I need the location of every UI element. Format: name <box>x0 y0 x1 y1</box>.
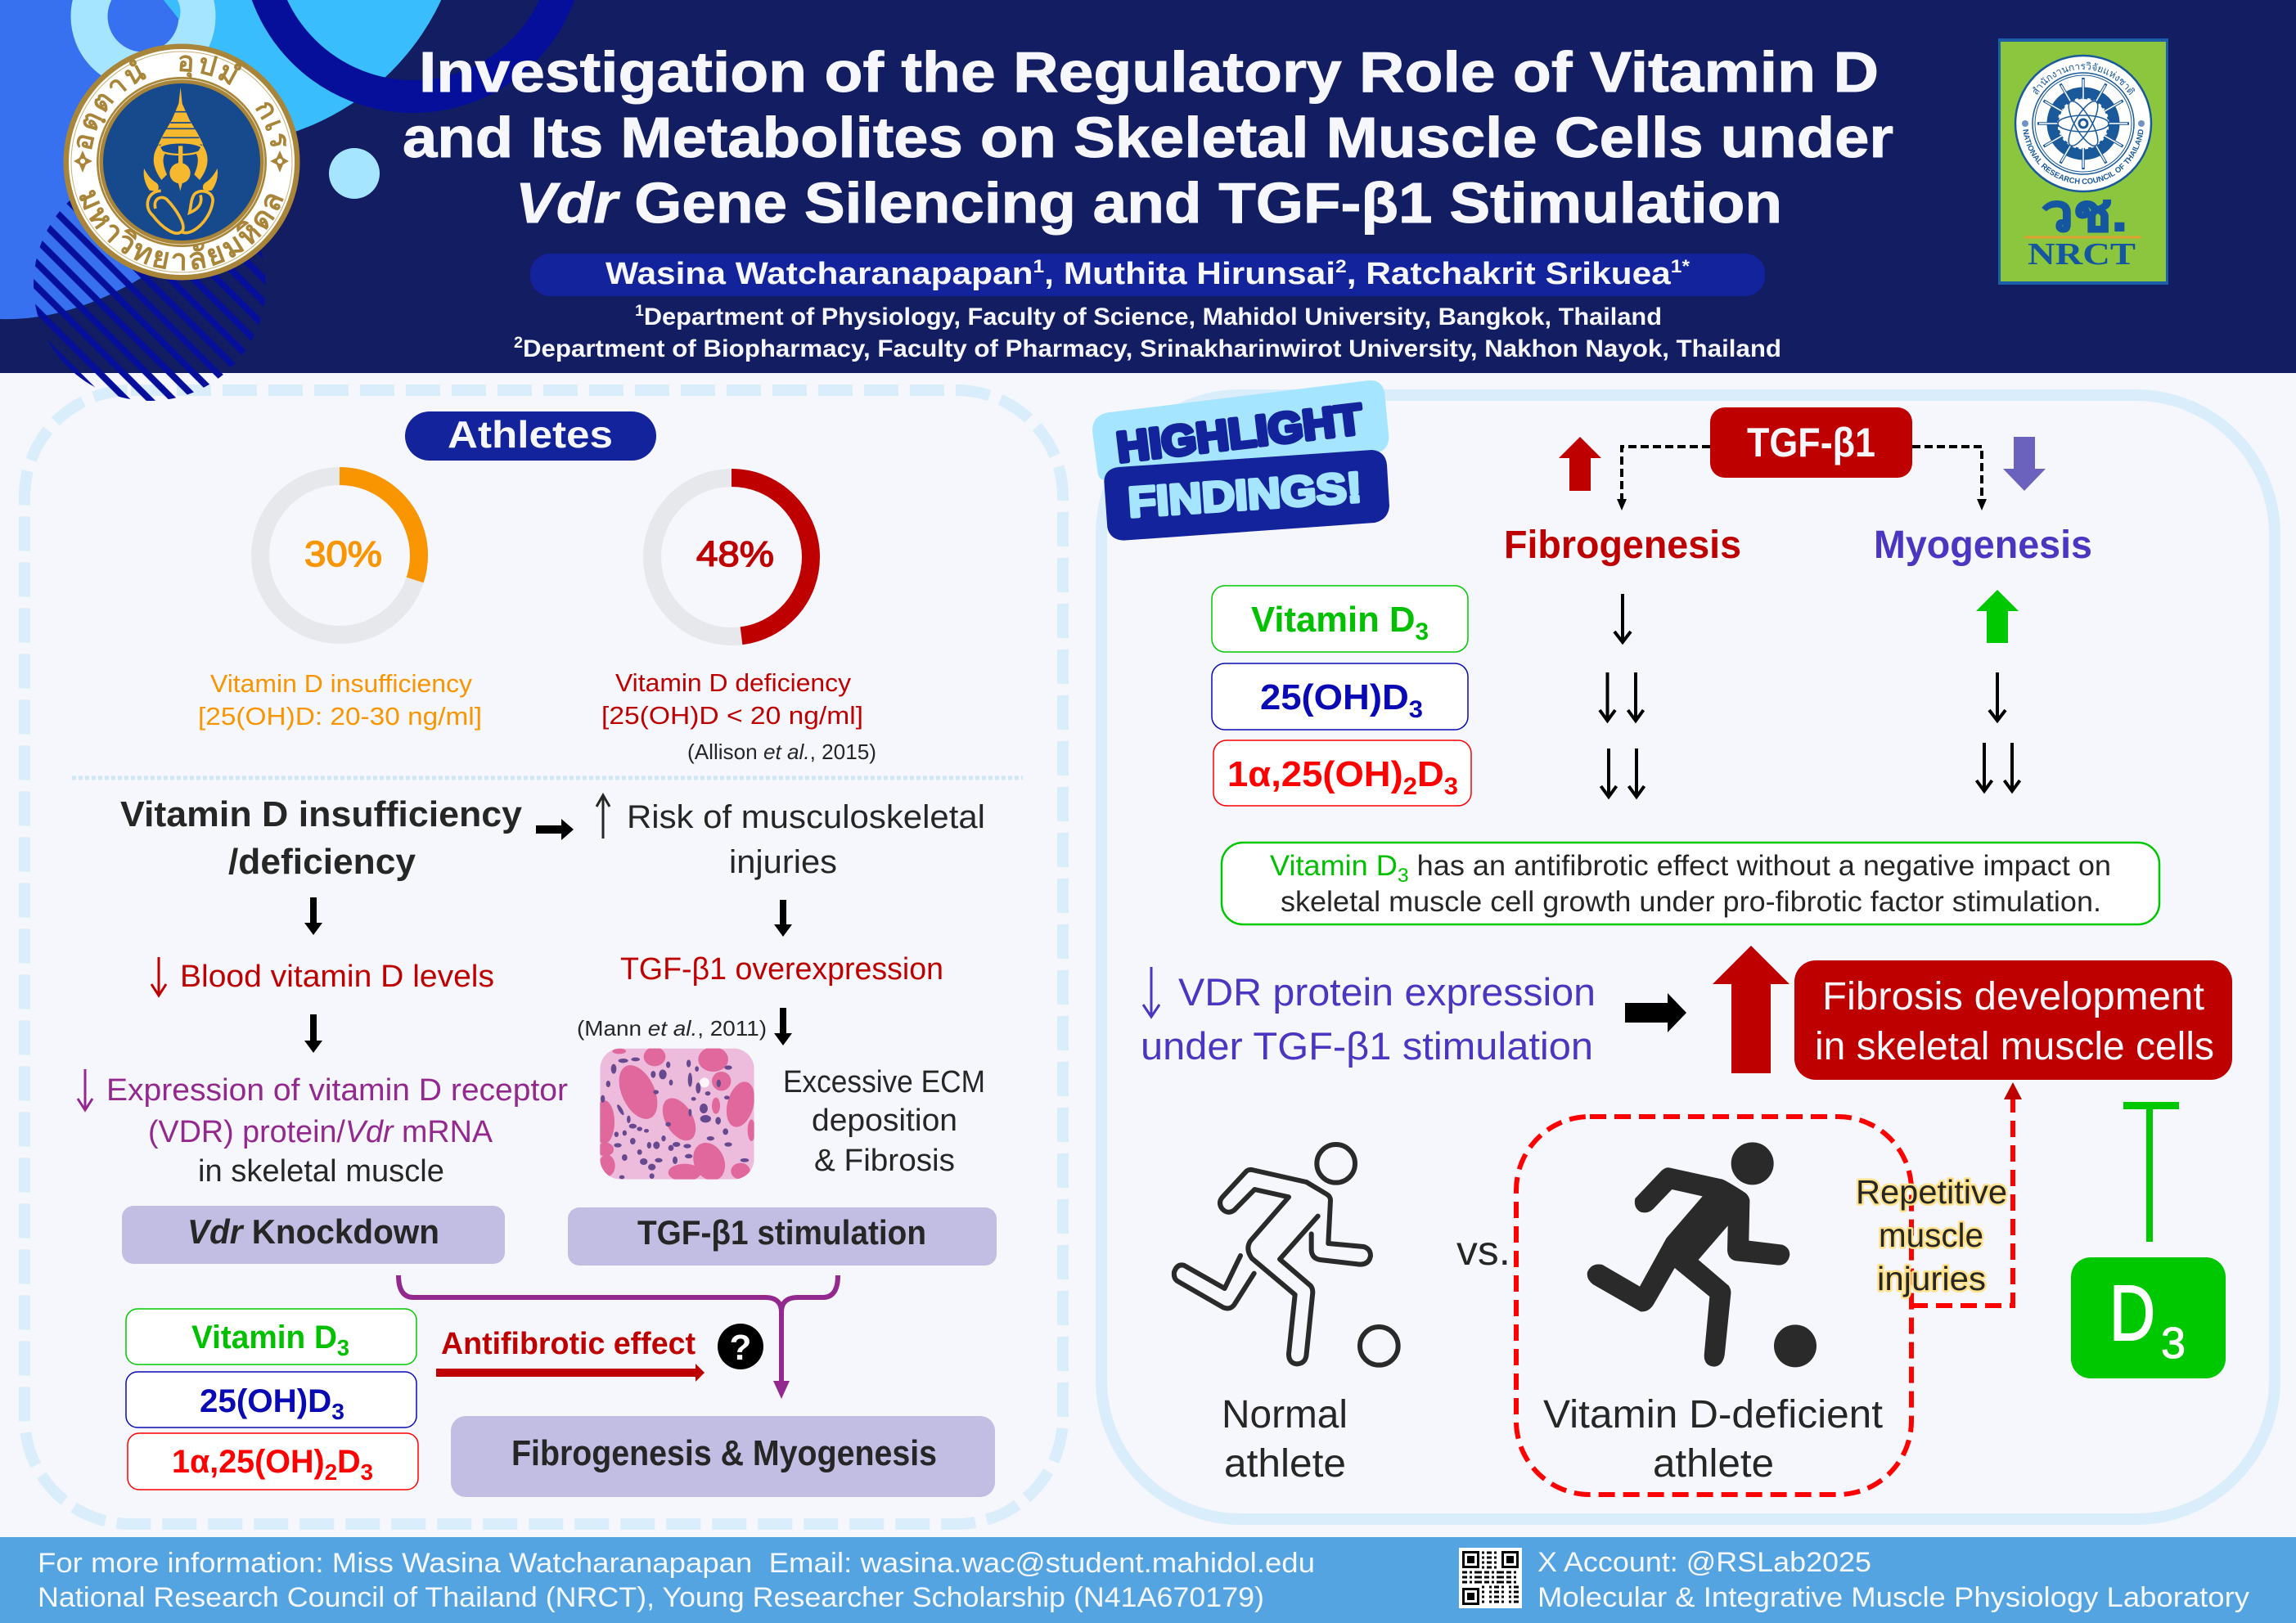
heading: myogenesis: Myogenesis <box>1874 524 2092 567</box>
authors pill <box>530 254 1765 296</box>
box: Vdr knockdown: Vdr Knockdown <box>187 1212 439 1251</box>
text: Vitamin D insufficiency/deficiency: Vitamin D insufficiency <box>120 794 523 834</box>
text: vitamin D-deficient athlete <box>1543 1393 1883 1486</box>
icon: QR code <box>1459 1548 1522 1608</box>
panel: athletes (left dashed) <box>25 390 1063 1524</box>
heading: Athletes: Athletes <box>448 413 613 456</box>
inhibition bar: D3 to fibrosis <box>2123 1102 2179 1242</box>
box: vitamin D3: Vitamin D <box>191 1320 342 1355</box>
text: excessive ECM deposition and fibrosis: & Fibrosis <box>814 1144 955 1178</box>
box: fibrosis development <box>1794 960 2232 1080</box>
box: TGF-beta1 stimulation: TGF-β1 stimulation <box>637 1213 926 1252</box>
title: and Its Metabolites on Skeletal Muscle Cells under <box>403 106 1893 169</box>
arrow: myogenesis green up <box>1976 590 2019 643</box>
label: Vitamin D insufficiency <box>198 669 482 731</box>
box: 25(OH)D3: 3 <box>331 1399 344 1424</box>
donut chart: 48% deficiency <box>652 478 811 636</box>
label: Vitamin D insufficiency: [25(OH)D: 20-30 ng/ml] <box>198 702 482 731</box>
text: antifibrotic effect: Antifibrotic effect <box>441 1327 696 1361</box>
arrow: down left 1 <box>304 897 322 935</box>
text: VDR protein expression <box>1141 970 1596 1068</box>
striped circle decoration <box>34 169 266 401</box>
affiliations: Department of Physiology, Faculty of Science, Mahidol University, Bangkok, Thailand <box>644 303 1662 330</box>
arrow: big red up <box>1713 946 1790 1073</box>
text: risk of musculoskeletal injuries: Risk of musculoskeletal <box>627 799 985 835</box>
logo: NRCT: วช. <box>2042 186 2127 242</box>
bracket arrow: to fibrogenesis and myogenesis <box>398 1275 838 1399</box>
box: Vdr knockdown <box>122 1206 505 1264</box>
text: expression of VDR <box>106 1073 568 1189</box>
callout: vitamin D3 antifibrotic effect: skeletal muscle cell growth under pro-fibrotic factor stimulation. <box>1281 886 2101 918</box>
authors pill: 1 <box>1033 256 1044 276</box>
text: Vitamin D insufficiency/deficiency: /deficiency <box>228 842 416 882</box>
row: 25(OH)D3: 3 <box>1409 696 1423 723</box>
row: vitamin D3: Vitamin D <box>1251 600 1416 640</box>
header decoration shapes <box>0 0 569 319</box>
text: excessive ECM deposition and fibrosis: Excessive ECM <box>783 1065 985 1099</box>
row: 25(OH)D3: 25(OH)D <box>1260 677 1404 717</box>
row: vitamin D3 <box>1212 586 1468 652</box>
title: Vdr Gene Silencing and TGF-β1 Stimulation <box>515 171 1782 235</box>
image: fibrosis histology <box>600 1049 754 1180</box>
callout: vitamin D3 antifibrotic effect: 3 <box>1398 865 1409 887</box>
box: fibrogenesis and myogenesis <box>451 1416 995 1497</box>
footer: contact text: For more information: Miss Wasina Watcharanapapan Email: wasina.wac@student.mahidol.edu <box>38 1548 1315 1579</box>
affiliations: 2 <box>514 335 523 352</box>
arrow: fibrogenesis up <box>1559 437 1601 491</box>
arrow: down right 2 <box>774 1008 792 1045</box>
text: expression of VDR: in skeletal muscle <box>198 1154 444 1189</box>
icon: normal athlete (outline) <box>1174 1144 1398 1365</box>
text: vitamin D-deficient athlete: Vitamin D-deficient <box>1543 1393 1883 1436</box>
row: 1alpha,25(OH)2D3 <box>1213 740 1471 806</box>
donut chart: 30% insufficiency <box>260 476 419 635</box>
citation: Mann: (Mann et al., 2011) <box>577 1016 767 1041</box>
sticker: highlight findings: FINDINGS! <box>1127 464 1363 527</box>
box: TGF-beta1 stimulation <box>568 1207 997 1266</box>
label: Vitamin D insufficiency: Vitamin D insufficiency <box>210 669 473 698</box>
text: expression of VDR: (VDR) protein/Vdr mRNA <box>148 1115 493 1149</box>
authors pill: , Ratchakrit Srikuea <box>1347 257 1672 291</box>
text: excessive ECM deposition and fibrosis: deposition <box>812 1104 957 1138</box>
text: risk of musculoskeletal injuries <box>627 799 985 880</box>
row: 1alpha,25(OH)2D3: 3 <box>1444 773 1458 800</box>
authors pill: Wasina Watcharanapapan <box>606 257 988 291</box>
text: Vitamin D insufficiency/deficiency <box>120 794 523 882</box>
panel: highlight findings (right) <box>1101 395 2275 1519</box>
box: fibrosis development: Fibrosis development <box>1822 975 2204 1018</box>
arrow: thin indigo down <box>1143 967 1159 1017</box>
arrows: myogenesis effects <box>1977 672 2019 791</box>
label: Vitamin D deficiency <box>601 668 863 730</box>
row: vitamin D3: 3 <box>1415 618 1429 645</box>
title: Investigation of the Regulatory Role of Vitamin D <box>419 40 1879 104</box>
box: fibrogenesis and myogenesis: Fibrogenesis & Myogenesis <box>511 1433 937 1473</box>
logo: NRCT: NATIONAL RESEARCH COUNCIL OF THAILAND <box>2023 129 2144 184</box>
arrow: thin red down <box>151 957 166 996</box>
arrow: myogenesis down <box>2003 437 2046 491</box>
box: 1alpha,25(OH)2D3: D <box>337 1444 361 1480</box>
text: TGF-beta1 overexpression: TGF-β1 overexpression <box>620 952 943 987</box>
title <box>403 40 1893 235</box>
text: blood vitamin D levels: Blood vitamin D levels <box>180 960 494 994</box>
arrow: thin up <box>597 795 610 838</box>
text: vitamin D-deficient athlete: athlete <box>1653 1442 1774 1486</box>
footer: contact text: National Research Council of Thailand (NRCT), Young Researcher Scholarship (N41A670179) <box>38 1582 1264 1613</box>
row: 1alpha,25(OH)2D3: D <box>1417 754 1444 794</box>
label: Vitamin D deficiency: [25(OH)D < 20 ng/ml] <box>601 701 863 730</box>
logo: Mahidol University seal <box>64 44 299 280</box>
text: VDR protein expression: under TGF-β1 stimulation <box>1141 1024 1593 1068</box>
sticker: highlight findings <box>1092 380 1389 541</box>
arrow: to risk <box>536 819 574 840</box>
icon: deficient athlete (filled) <box>1587 1142 1817 1367</box>
footer band <box>0 1537 2296 1623</box>
text: normal athlete: athlete <box>1224 1442 1346 1486</box>
footer: contact text <box>38 1548 1315 1613</box>
logo: NRCT: NRCT <box>2028 237 2136 272</box>
text: repetitive muscle injuries <box>1856 1173 2007 1297</box>
text: normal athlete: Normal <box>1222 1393 1348 1436</box>
donut chart: 30% insufficiency: 30% <box>304 534 382 574</box>
box: 1alpha,25(OH)2D3: 2 <box>325 1459 337 1485</box>
box: 25(OH)D3 <box>126 1372 416 1427</box>
box: 1alpha,25(OH)2D3 <box>128 1433 418 1490</box>
arrow: down right 1 <box>774 900 792 937</box>
dashed connectors <box>1617 447 1987 510</box>
icon: question mark: ? <box>730 1328 751 1368</box>
footer: lab text: X Account: @RSLab2025 <box>1537 1547 1871 1578</box>
text: repetitive muscle injuries: Repetitive <box>1856 1173 2007 1211</box>
affiliations <box>514 303 1781 362</box>
arrow: black right <box>1625 993 1686 1032</box>
logo: Mahidol University seal: มหาวิทยาลัยมหิดล <box>79 190 284 271</box>
arrow: repetitive injuries to fibrosis <box>1911 1082 2022 1306</box>
arrow: down left 2 <box>304 1014 322 1053</box>
text: VDR protein expression: VDR protein expression <box>1178 970 1596 1014</box>
arrow: thin purple down <box>78 1069 92 1110</box>
arrows: fibrogenesis effects <box>1600 594 1645 797</box>
text: expression of VDR: Expression of vitamin D receptor <box>106 1073 568 1108</box>
authors pill: 1* <box>1671 256 1690 276</box>
row: 1alpha,25(OH)2D3: 1α,25(OH) <box>1227 754 1398 794</box>
authors pill: 2 <box>1335 256 1347 276</box>
citation: Allison: (Allison et al., 2015) <box>687 740 876 764</box>
affiliations: 1 <box>635 303 644 320</box>
donut chart: 48% deficiency: 48% <box>696 534 774 574</box>
box: 25(OH)D3: 25(OH)D <box>200 1383 331 1419</box>
affiliations: Department of Biopharmacy, Faculty of Pharmacy, Srinakharinwirot University, Nakhon Nayok, Thailand <box>523 335 1781 362</box>
icon: question mark <box>718 1324 763 1369</box>
box: fibrosis development: in skeletal muscle cells <box>1815 1025 2214 1068</box>
box: TGF-beta1: TGF-β1 <box>1747 420 1875 465</box>
text: repetitive muscle injuries: muscle <box>1879 1216 1983 1254</box>
logo: Mahidol University seal: อตฺตานํ อุปมํ กเร <box>77 55 286 150</box>
callout: vitamin D3 antifibrotic effect <box>1222 843 2159 924</box>
dashed box: vitamin D-deficient athlete <box>1516 1117 1911 1495</box>
arrow: antifibrotic <box>436 1364 705 1382</box>
text: normal athlete <box>1222 1393 1348 1486</box>
sticker: highlight findings: HIGHLIGHT <box>1114 396 1366 472</box>
box: 1alpha,25(OH)2D3: 3 <box>361 1459 373 1485</box>
text: repetitive muscle injuries: injuries <box>1877 1260 1986 1297</box>
authors pill: , Muthita Hirunsai <box>1044 257 1335 291</box>
heading: fibrogenesis: Fibrogenesis <box>1504 524 1741 567</box>
text: excessive ECM deposition and fibrosis <box>783 1065 985 1178</box>
box: D3: D <box>2109 1270 2155 1357</box>
logo: NRCT: สำนักงานการวิจัยแห่งชาติ <box>2033 62 2135 95</box>
footer: lab text: Molecular & Integrative Muscle Physiology Laboratory <box>1537 1582 2249 1613</box>
box: 1alpha,25(OH)2D3: 1α,25(OH) <box>172 1444 326 1480</box>
footer: lab text <box>1537 1547 2249 1613</box>
header band <box>0 0 2296 373</box>
label: Vitamin D deficiency: Vitamin D deficiency <box>615 668 852 697</box>
heading: Athletes <box>405 411 656 461</box>
box: vitamin D3 <box>126 1309 416 1364</box>
box: vitamin D3: 3 <box>337 1335 349 1360</box>
row: 1alpha,25(OH)2D3: 2 <box>1403 773 1417 800</box>
logo: NRCT <box>1998 38 2168 285</box>
text: risk of musculoskeletal injuries: injuries <box>729 844 837 880</box>
row: 25(OH)D3 <box>1212 663 1468 730</box>
callout: vitamin D3 antifibrotic effect: Vitamin D <box>1270 850 1398 882</box>
box: D3 <box>2071 1257 2226 1378</box>
callout: vitamin D3 antifibrotic effect: has an antifibrotic effect without a negative impact on <box>1409 850 2111 882</box>
text: vs: vs. <box>1456 1228 1510 1274</box>
box: TGF-beta1 <box>1710 407 1912 478</box>
box: D3: 3 <box>2161 1319 2186 1368</box>
